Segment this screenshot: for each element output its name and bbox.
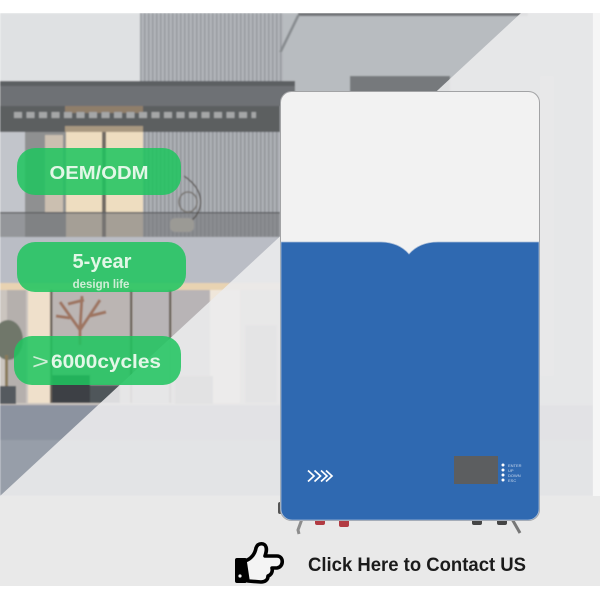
feature pill: 6000 cycles: > [32, 349, 49, 374]
bottom contact band background [0, 496, 600, 586]
house photo background [0, 13, 593, 496]
control buttons: UP [508, 468, 514, 473]
icon: pointing hand [235, 544, 282, 583]
display screen [454, 456, 498, 484]
feature pill: 5-year design life: design life [73, 279, 129, 291]
feature pill: 5-year design life [17, 242, 186, 292]
right margin strip [593, 13, 600, 496]
battery unit [280, 92, 540, 520]
feature pill: 5-year design life: 5-year [73, 251, 132, 273]
control buttons: ESC [508, 478, 516, 483]
battery blue lower panel [281, 242, 539, 520]
control buttons [502, 463, 522, 483]
feature pill: 6000 cycles: 6000cycles [51, 352, 161, 373]
control buttons: DOWN [508, 473, 521, 478]
feature pill: OEM/ODM: OEM/ODM [50, 162, 148, 183]
feature pill: 6000 cycles [14, 336, 181, 385]
chevrons [308, 470, 332, 482]
battery casing [280, 92, 540, 520]
feature pill: OEM/ODM [17, 148, 181, 195]
light diagonal overlay [0, 13, 593, 496]
contact call to action: Click Here to Contact US [308, 555, 526, 576]
control buttons: ENTER [508, 463, 522, 468]
battery feet and terminals [278, 502, 520, 534]
